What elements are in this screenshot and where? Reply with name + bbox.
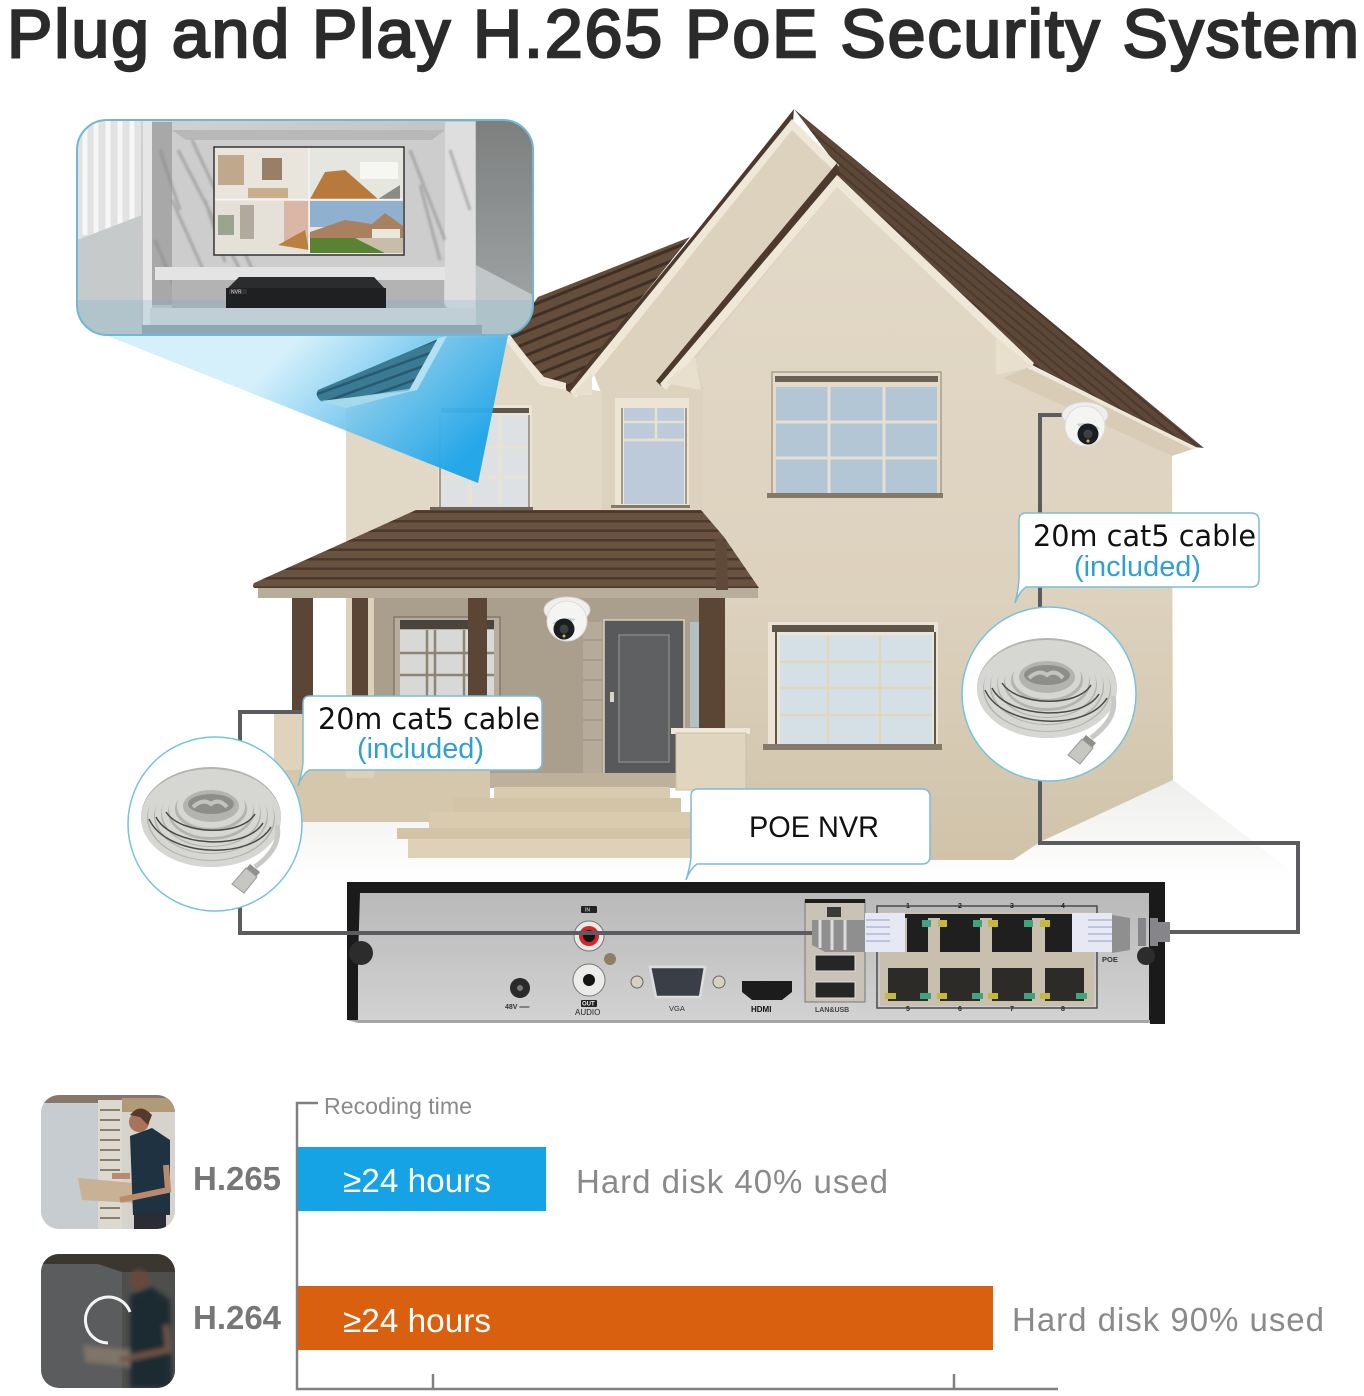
house illustration xyxy=(253,109,1290,882)
white gap left of wing wall xyxy=(313,598,346,698)
power socket xyxy=(505,978,530,1011)
axes xyxy=(297,1103,1058,1389)
blue viewing beam xyxy=(105,335,508,483)
porch window xyxy=(394,617,500,707)
PoE ports: POE xyxy=(1102,955,1118,964)
bar note: H.265: Hard disk 40% used xyxy=(576,1163,888,1200)
porch floor and steps xyxy=(397,773,692,858)
callout: left cable: 20m cat5 cable xyxy=(318,702,540,736)
NVR rear panel xyxy=(347,882,1165,1024)
callout: left cable: (included) xyxy=(357,733,484,765)
front and side wall xyxy=(695,187,1173,860)
PoE ports: 3 xyxy=(1010,903,1014,910)
bar: H.264: ≥24 hours xyxy=(343,1302,491,1339)
middle brown roof xyxy=(510,237,690,390)
PoE ports: 7 xyxy=(1010,1006,1014,1013)
low porch walls xyxy=(274,598,490,822)
front gable trim xyxy=(656,163,1034,390)
shelf NVR xyxy=(226,277,386,308)
window: upper left xyxy=(430,405,533,511)
thumbnail: H.265 clear photo xyxy=(41,1095,175,1229)
audio connectors xyxy=(573,906,616,1017)
label: H.264: H.264 xyxy=(193,1299,282,1336)
mounting screws xyxy=(349,941,1155,965)
callout: right cable: 20m cat5 cable xyxy=(1033,519,1256,553)
HDMI port: HDMI xyxy=(751,1005,771,1014)
left wing wall xyxy=(346,337,620,600)
left small roof tinted blue xyxy=(317,336,447,408)
bar: H.265 xyxy=(298,1147,546,1211)
porch roof xyxy=(253,510,759,598)
panel: indoor room with TV and NVR xyxy=(77,120,533,335)
porch columns xyxy=(292,598,725,730)
porch back wall xyxy=(374,598,702,775)
tall gable face xyxy=(593,125,1003,600)
callout: right cable xyxy=(1015,513,1259,603)
network plug: right xyxy=(1072,913,1170,953)
audio connectors: OUT xyxy=(582,1002,595,1008)
window: upper right large xyxy=(767,372,943,498)
curtain xyxy=(78,121,141,240)
wing gutter trim xyxy=(506,336,566,390)
PoE ports xyxy=(877,903,1118,1013)
LAN and USB block: LAN&USB xyxy=(815,1007,849,1014)
icon: dome camera porch xyxy=(544,597,590,641)
PoE ports: 5 xyxy=(906,1006,910,1013)
thumbnail: H.264 dim loading photo xyxy=(41,1254,175,1388)
VGA port xyxy=(631,967,725,1013)
main right roof xyxy=(794,109,1204,448)
HDMI port xyxy=(742,981,792,1014)
PoE ports: 4 xyxy=(1061,903,1065,910)
PoE ports: 1 xyxy=(906,903,910,910)
chart: recording time comparison xyxy=(297,1093,1324,1389)
audio connectors: AUDIO xyxy=(575,1008,600,1017)
door xyxy=(583,620,701,777)
PoE ports: 8 xyxy=(1061,1006,1065,1013)
network plug: left xyxy=(812,913,905,952)
bar: H.264 xyxy=(298,1286,993,1350)
cable coil: right xyxy=(962,607,1136,781)
axis title: Recoding time xyxy=(324,1093,472,1119)
cable coil: left xyxy=(128,737,302,911)
callout: POE NVR xyxy=(686,789,930,880)
VGA port: VGA xyxy=(669,1004,685,1013)
power socket: 48V ══ xyxy=(505,1004,529,1011)
column base xyxy=(671,728,750,790)
callout: POE NVR: POE NVR xyxy=(749,811,879,844)
bar note: H.264: Hard disk 90% used xyxy=(1012,1301,1324,1338)
eave fascia xyxy=(1003,366,1196,456)
LAN and USB block xyxy=(805,899,865,1014)
tall gable trim xyxy=(566,109,839,398)
PoE ports: 6 xyxy=(958,1006,962,1013)
callout: left cable xyxy=(298,696,542,786)
bar: H.265: ≥24 hours xyxy=(343,1162,491,1199)
ground xyxy=(262,780,1290,882)
window: upper small centre xyxy=(611,398,690,508)
label: H.265: H.265 xyxy=(193,1160,281,1197)
cables xyxy=(240,415,1298,933)
TV screen xyxy=(214,147,404,255)
icon: dome camera wall xyxy=(1062,402,1108,446)
PoE ports: 2 xyxy=(958,903,962,910)
icon: loading spinner xyxy=(85,1297,130,1343)
audio connectors: IN xyxy=(585,908,590,914)
window: lower right large xyxy=(763,622,942,750)
marble recess xyxy=(227,131,445,267)
shelf xyxy=(155,267,445,280)
shelf NVR: NVR xyxy=(231,290,242,296)
callout: right cable: (included) xyxy=(1074,551,1201,583)
